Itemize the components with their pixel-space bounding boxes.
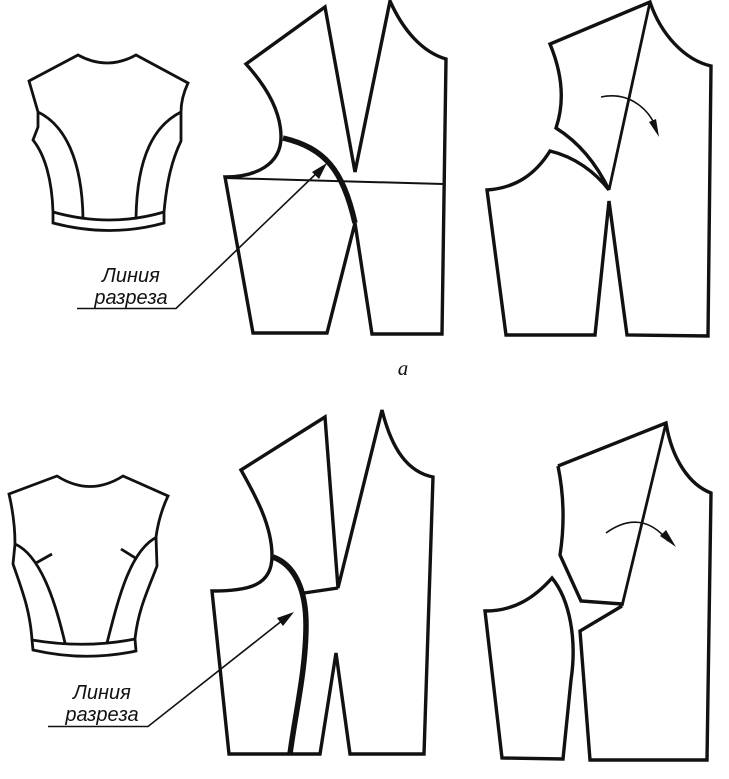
pattern: bodice with curved cut line xyxy=(212,410,433,754)
icon: top garment sketch xyxy=(29,55,188,230)
label: cut line, bottom: разреза xyxy=(64,704,139,726)
icon: bottom garment sketch xyxy=(9,476,168,656)
label: cut line, top: разреза xyxy=(93,287,168,309)
pattern: dart transferred, top xyxy=(487,2,711,336)
label: cut line, bottom: Линия xyxy=(71,682,131,704)
panel: top row, variant a xyxy=(29,1,711,380)
caption: a: а xyxy=(398,356,408,380)
label: cut line, top: Линия xyxy=(100,265,160,287)
label: cut line, bottom xyxy=(48,612,294,726)
pattern: original bodice with cut line xyxy=(225,1,446,334)
label: cut line, top xyxy=(77,163,327,309)
arrow: rotation, bottom xyxy=(606,522,676,547)
panel: bottom row, variant b xyxy=(9,410,711,760)
arrow: rotation, top xyxy=(601,96,659,137)
pattern: dart transferred, bottom xyxy=(485,423,711,760)
